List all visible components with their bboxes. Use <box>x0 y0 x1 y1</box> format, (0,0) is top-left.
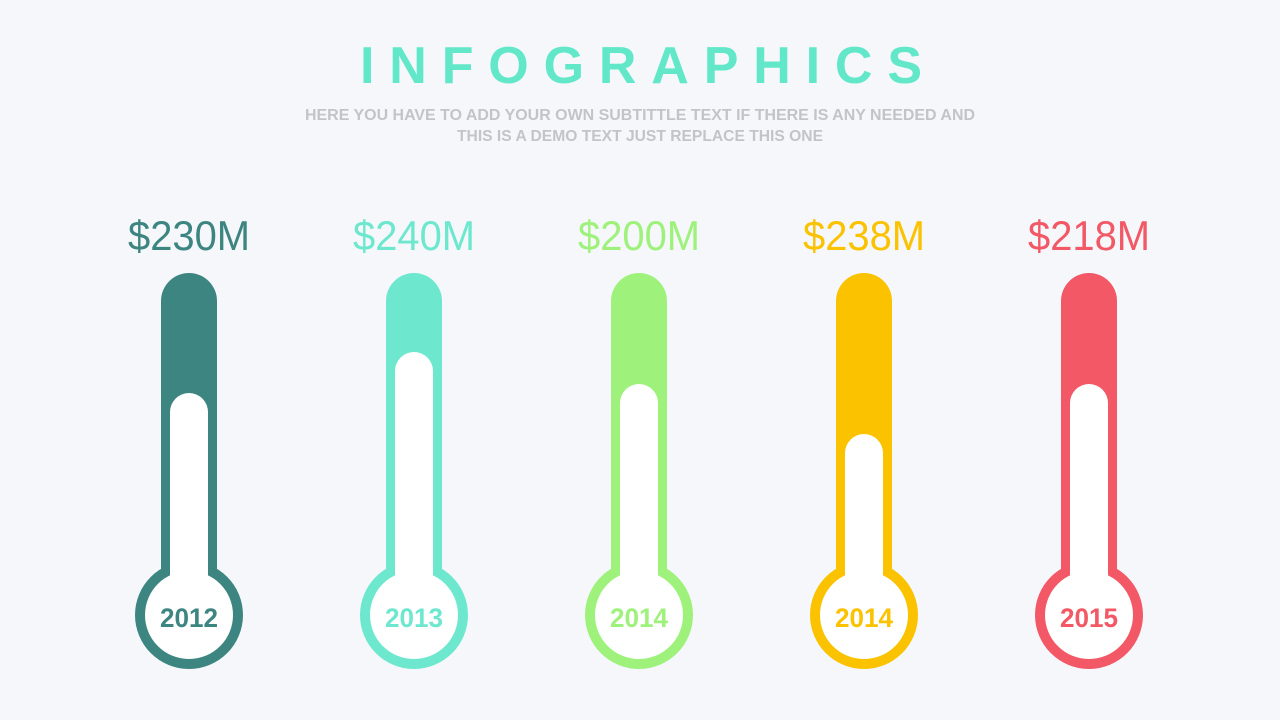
thermometer: 2015: 2015 <box>1060 603 1118 633</box>
thermometer: 2014 yellow <box>803 212 925 669</box>
thermometer: 2014 yellow: 2014 <box>835 603 893 633</box>
thermometer: 2014 yellow: $238M <box>803 212 925 259</box>
thermometer: 2013 <box>353 212 475 669</box>
thermometer: 2014 green <box>578 212 700 669</box>
thermometer: 2014 green: 2014 <box>610 603 668 633</box>
thermometer: 2014 green: $200M <box>578 212 700 259</box>
subtitle: THIS IS A DEMO TEXT JUST REPLACE THIS ONE <box>457 128 823 145</box>
thermometer: 2012: 2012 <box>160 603 218 633</box>
thermometer: 2013: $240M <box>353 212 475 259</box>
thermometer: 2012 <box>128 212 250 669</box>
thermometer: 2015 <box>1028 212 1150 669</box>
thermometer: 2015: $218M <box>1028 212 1150 259</box>
subtitle: HERE YOU HAVE TO ADD YOUR OWN SUBTITTLE TEXT IF THERE IS ANY NEEDED AND <box>305 107 975 124</box>
thermometer: 2013: 2013 <box>385 603 443 633</box>
thermometer: 2012: $230M <box>128 212 250 259</box>
title: INFOGRAPHICS <box>360 37 922 95</box>
subtitle <box>305 107 975 145</box>
